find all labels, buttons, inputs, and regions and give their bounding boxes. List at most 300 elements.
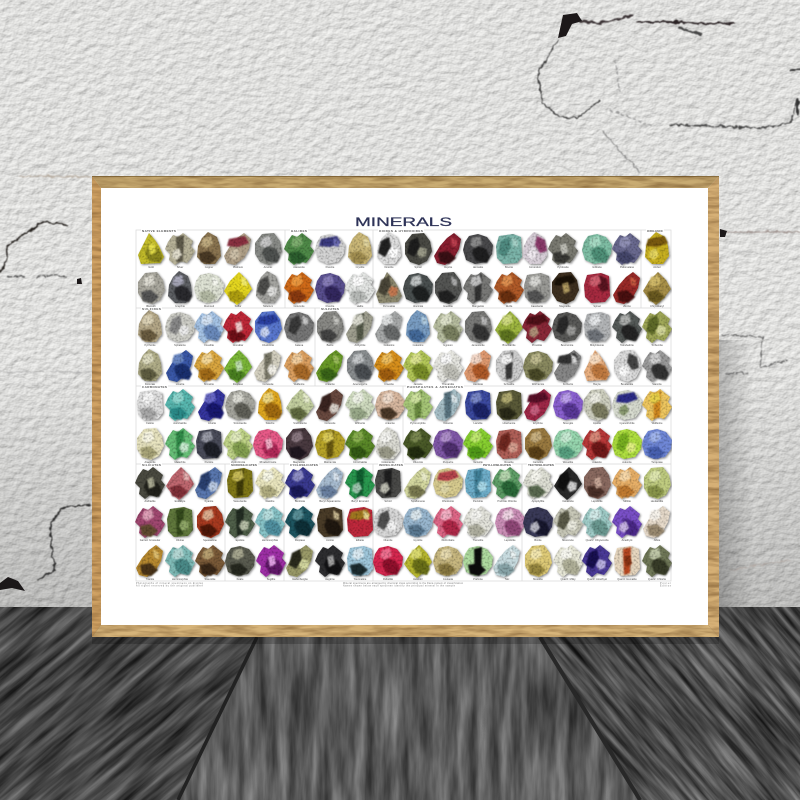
mineral: magnesite xyxy=(286,428,313,464)
mineral: quartz milky xyxy=(553,545,583,581)
mineral: anhydrite: Anhydrite xyxy=(355,343,366,347)
mineral: hanksite: Hanksite xyxy=(473,382,484,386)
mineral: quartz hematite: Quartz: Hematite xyxy=(617,577,637,581)
mineral: zincite xyxy=(613,272,640,308)
mineral: bournonite: Bournonite xyxy=(561,343,574,347)
mineral: rhodochrosite brown: Cerussite xyxy=(325,421,336,425)
mineral: diamond: Diamond xyxy=(204,304,215,308)
mineral: molybdenite xyxy=(584,312,610,347)
mineral: jarosite: Jarosite xyxy=(413,382,423,386)
section headings: SULFATES xyxy=(321,307,339,311)
mineral: cotunnite xyxy=(284,272,314,308)
mineral: chrysoberyl: Chrysoberyl xyxy=(650,304,664,308)
mineral: hemimorphite aqua xyxy=(255,506,285,542)
mineral: gibbsite: Gibbsite xyxy=(592,265,602,269)
mineral: erythrite: Erythrite xyxy=(533,421,543,425)
mineral: feldspar: Albite xyxy=(654,538,661,542)
section headings: PHOSPHATES & ARSENATES xyxy=(407,385,463,389)
mineral: barite gray: Barite xyxy=(327,343,334,347)
mineral: heulandite green: Heulandite xyxy=(651,499,664,503)
mineral: talc: Talc xyxy=(505,577,510,581)
mineral: pectolite: Pectolite xyxy=(473,499,484,503)
mineral: rhodochrosite brown xyxy=(316,389,343,425)
mineral: ilvaite black xyxy=(315,545,345,581)
mineral: wulfenite orange: Wulfenite xyxy=(294,382,305,386)
mineral: cyanotrichite: Cyanotrichite xyxy=(619,421,635,425)
mineral: chalcocite: Chalcocite xyxy=(262,343,275,347)
mineral: cavansite geode xyxy=(373,507,403,542)
mineral: tetrahedrite: Tetrahedrite xyxy=(620,343,634,347)
mineral: roselite: Roselite xyxy=(504,460,514,464)
section headings: SULFIDES xyxy=(142,307,161,311)
mineral: stilbite xyxy=(612,467,642,503)
mineral: anhydrite xyxy=(346,311,373,347)
mineral: dioptase dark: Dioptase xyxy=(295,538,306,542)
mineral: pyrite gray: Jamesonite xyxy=(471,343,485,347)
mineral: brochantite: Brochantite xyxy=(502,343,516,347)
mineral: malachite: Malachite xyxy=(174,460,186,464)
mineral: adamite red: Adamite xyxy=(592,460,602,464)
mineral: cotunnite: Cotunnite xyxy=(293,304,305,308)
mineral: scheelite: Scheelite xyxy=(504,382,515,386)
mineral: rhodonite pink xyxy=(433,506,463,542)
mineral: talc xyxy=(493,545,520,581)
mineral: spessartine xyxy=(197,506,224,542)
mineral: quartz black xyxy=(554,467,582,503)
mineral: gold xyxy=(138,233,164,269)
mineral: axinite: Axinite xyxy=(326,538,334,542)
mineral: cerianite dark: Parisite xyxy=(205,460,214,464)
mineral: quartz black: Cavansite xyxy=(562,499,574,503)
mineral: silver xyxy=(165,233,195,269)
mineral: elbaite slice xyxy=(347,507,373,542)
mineral: thenardite: Thenardite xyxy=(442,382,455,386)
mineral: stannite xyxy=(642,350,672,386)
mineral: proustite: Proustite xyxy=(532,343,543,347)
mineral: epidote: Epidote xyxy=(236,538,245,542)
mineral: spinel black: Spinel xyxy=(414,265,422,269)
mineral: vesuvianite xyxy=(227,468,253,503)
mineral: tellurium xyxy=(256,271,280,308)
mineral: rhodonite: Rhodonite xyxy=(442,499,454,503)
mineral: axinite xyxy=(317,507,343,542)
mineral: andradite cream xyxy=(286,545,313,581)
mineral: thenardite xyxy=(433,350,463,386)
mineral: gold: Gold xyxy=(148,265,154,269)
mineral: hemimorphite yellow: Mesolite xyxy=(533,577,543,581)
mineral: quartz amethyst xyxy=(582,545,612,581)
mineral: turquoise: Turquoise xyxy=(651,460,663,464)
mineral: pyrite gray xyxy=(465,311,492,347)
section headings: SILICATES xyxy=(142,463,161,467)
mineral: epidote xyxy=(225,506,255,542)
mineral: heliodor xyxy=(404,545,432,581)
footer fine print: Photographs of mineral specimens on display xyxy=(136,582,204,585)
mineral: celestine blue xyxy=(406,310,430,347)
wooden floor planks xyxy=(0,607,800,800)
mineral: goethite xyxy=(435,272,462,308)
mineral: biotite: Biotite xyxy=(534,538,542,542)
mineral: galena xyxy=(284,312,314,347)
mineral: rubellite xyxy=(373,546,403,581)
mineral: amethyst xyxy=(612,506,642,542)
mineral: zoisite xyxy=(167,507,193,542)
mineral: olivenite xyxy=(403,428,433,464)
mineral: garnet pink xyxy=(135,506,165,542)
mineral: pyrolusite xyxy=(548,233,578,269)
mineral: apatite white: Apatite xyxy=(593,421,602,425)
mineral: torbernite xyxy=(642,311,672,347)
mineral: strontianite xyxy=(225,390,255,425)
mineral: biotite xyxy=(523,507,553,542)
mineral: spinel black xyxy=(405,233,432,269)
mineral: apatite olive xyxy=(523,351,553,386)
mineral: psilomelane xyxy=(612,233,642,269)
mineral: chalcocite xyxy=(255,311,282,347)
mineral: vivianite: Vivianite xyxy=(443,421,453,425)
footer fine print: All rights reserved by the original publisher xyxy=(136,584,203,588)
mineral: kyanite xyxy=(195,467,222,503)
mineral: aquamarine xyxy=(316,467,343,503)
mineral: amethyst: Amethyst xyxy=(622,538,633,542)
mineral: dioptase: Dioptase xyxy=(233,382,244,386)
mineral: datolite xyxy=(255,467,285,503)
mineral: purpurite: Purpurite xyxy=(443,460,454,464)
mineral: wavellite: Wavellite xyxy=(563,460,574,464)
mineral: variscite xyxy=(463,428,493,464)
mineral: siderite xyxy=(258,388,282,425)
mineral: pyrolusite: Pyrolusite xyxy=(557,265,569,269)
mineral: copper xyxy=(197,232,221,269)
footer fine print: Poster xyxy=(660,582,671,585)
mineral: conichalcite: Conichalcite xyxy=(353,460,368,464)
mineral: rutile: Rutile xyxy=(506,304,513,308)
mineral: quartz chlorite: Quartz: Chlorite xyxy=(648,577,667,581)
mineral: epidote moss: Antlerite xyxy=(325,382,335,386)
mineral: andradite cream: Hedenbergite xyxy=(292,577,308,581)
mineral: elbaite slice: Elbaite xyxy=(356,538,365,542)
mineral: muscovite: Muscovite xyxy=(562,538,574,542)
mineral: sugilite xyxy=(256,545,286,581)
mineral: cookeite: Cookeite xyxy=(443,577,454,581)
mineral: staurolite: Staurolite xyxy=(205,577,216,581)
mineral: prehnite black green xyxy=(463,546,493,581)
crack blotches xyxy=(0,13,727,591)
mineral: kyanite: Kyanite xyxy=(205,499,214,503)
section headings: CYCLOSILICATES xyxy=(290,463,318,467)
mineral: cerussite: Cerussite xyxy=(263,382,274,386)
mineral: datolite: Datolite xyxy=(266,499,275,503)
mineral: aquamarine: Beryl: Aquamarine xyxy=(319,499,341,503)
section headings: OXIDES & HYDROXIDES xyxy=(379,229,423,233)
mineral: lazulite: Lazulite xyxy=(474,421,483,425)
mineral: chrysocolla: Quartz: Chrysocolla xyxy=(586,538,609,542)
poster sheet xyxy=(101,188,708,625)
mineral: heliodor: Heliodor xyxy=(413,577,423,581)
mineral: lepidolite brown xyxy=(584,467,611,503)
mineral: fluorite violet: Fluorite xyxy=(326,304,335,308)
mineral: manganite: Manganite xyxy=(472,304,485,308)
mineral: strontianite: Strontianite xyxy=(233,421,247,425)
mineral: ferberite: Ferberite xyxy=(563,382,574,386)
section headings xyxy=(141,229,664,467)
mineral: fluorite blue xyxy=(315,234,345,269)
mineral: libethenite: Libethenite xyxy=(503,421,516,425)
mineral: spodumene yellow: Spodumene xyxy=(411,499,426,503)
mineral: cuprite xyxy=(434,233,461,269)
mineral: silver: Silver xyxy=(177,265,183,269)
mineral: mottramite: Mottramite xyxy=(324,460,337,464)
mineral: hemimorphite: Hydrozincite xyxy=(231,460,246,464)
mineral: purpurite xyxy=(433,429,463,464)
mineral: apophyllite: Apophyllite xyxy=(532,499,545,503)
mineral: arsenopyrite xyxy=(347,350,374,386)
mineral: garnet pink: Garnet: Grossular xyxy=(140,538,160,542)
mineral: pale blue ball: Gyrolite xyxy=(414,538,423,542)
mineral: jarosite xyxy=(403,350,433,386)
mineral: hematite: Hematite xyxy=(473,265,484,269)
mineral: rhodochrosite: Rhodochrosite xyxy=(260,460,277,464)
mineral: quartz amethyst: Quartz: Amethyst xyxy=(587,577,607,581)
mineral: cuprite: Cuprite xyxy=(444,265,453,269)
mineral: chrysoberyl xyxy=(643,272,671,308)
mineral: cassiterite xyxy=(524,273,550,308)
mineral: schorl: Schorl xyxy=(384,499,392,503)
mineral: spodumene yellow xyxy=(404,467,431,503)
mineral: tourmaline: Tourmaline xyxy=(354,577,367,581)
mineral: prehnite xyxy=(492,467,522,503)
mineral: heulandite green xyxy=(644,467,671,503)
mineral: halite xyxy=(345,272,375,308)
mineral: witherite: Witherite xyxy=(355,421,366,425)
section headings: CARBONATES xyxy=(142,385,167,389)
mineral: adamite red xyxy=(582,428,612,464)
mineral: rubellite: Rubellite xyxy=(383,577,394,581)
mineral: hemimorphite xyxy=(223,428,253,464)
mineral: aurichalcite xyxy=(165,389,195,425)
mineral: cerussite xyxy=(254,350,281,386)
mineral: zincite: Zincite xyxy=(623,304,631,308)
mineral: goethite: Goethite xyxy=(443,304,453,308)
mineral: aquamarine cluster xyxy=(165,545,195,581)
mineral: wulfenite orange xyxy=(284,350,314,386)
mineral: mimetite xyxy=(194,350,224,386)
section headings: HALIDES xyxy=(291,229,307,233)
mineral: bismuth: Bismuth xyxy=(146,304,156,308)
mineral: apophyllite xyxy=(523,467,553,503)
mineral: bournonite xyxy=(552,312,582,347)
mineral: benitoite xyxy=(285,467,315,503)
mineral: magnetite xyxy=(552,272,579,308)
mineral: sugilite: Sugilite xyxy=(267,577,276,581)
mineral: gypsum xyxy=(433,311,463,347)
mineral: arsenic xyxy=(255,233,282,269)
mineral: dolomite: Dolomite xyxy=(145,382,156,386)
mineral: lepidolite: Lepidolite xyxy=(504,538,516,542)
mineral: prehnite: Prehnite Chlorite xyxy=(497,499,517,503)
mineral: bismuth xyxy=(138,272,165,308)
mineral: sulfur xyxy=(224,272,252,308)
mineral: aquamarine cluster: Hemimorphite xyxy=(172,577,189,581)
mineral: azurite: Azurite xyxy=(208,421,217,425)
mineral: corundum xyxy=(523,232,547,269)
mineral: fluorite violet xyxy=(315,273,345,308)
mineral: witherite xyxy=(345,389,375,425)
mineral: hemimorphite aqua: Hemimorphite xyxy=(262,538,279,542)
mineral: ferberite xyxy=(554,350,581,386)
mineral: libethenite xyxy=(496,390,522,425)
mineral: rhodonite xyxy=(433,468,463,503)
mineral: tremolite white: Tremolite xyxy=(473,538,484,542)
mineral: colemanite: Colemanite xyxy=(381,460,395,464)
mineral: perovskite: Perovskite xyxy=(383,304,396,308)
mineral: lazulite xyxy=(465,390,491,425)
mineral: colemanite xyxy=(376,427,400,464)
mineral: eudialyte xyxy=(166,467,194,503)
section headings: ORGANIC xyxy=(647,229,664,233)
mineral: cinnabar xyxy=(223,311,253,347)
mineral: diamond xyxy=(194,273,224,308)
mineral: vivianite xyxy=(434,389,461,425)
mineral: barite gray xyxy=(317,311,344,347)
wall cracks xyxy=(0,15,800,580)
mineral: galena: Galena xyxy=(295,343,304,347)
section headings: NATIVE ELEMENTS xyxy=(142,229,176,233)
mineral: zoisite: Olivine xyxy=(176,538,185,542)
mineral: ilvaite black: Aegirine xyxy=(325,577,335,581)
mineral: rhodochrosite xyxy=(253,429,283,464)
mineral: pyrrhotite xyxy=(138,310,162,347)
mineral: malachite xyxy=(165,428,195,464)
mineral: manganite xyxy=(463,272,493,308)
mineral: rhodonite pink: Pezzottaite xyxy=(442,538,455,542)
mineral: wulfenite xyxy=(642,389,672,425)
mineral: cookeite xyxy=(433,546,463,581)
mineral: sphalerite xyxy=(165,312,195,347)
mineral: olivenite: Olivenite xyxy=(413,460,424,464)
section headings: PHYLLOSILICATES xyxy=(483,463,511,467)
mineral: smithsonite: Smithsonite xyxy=(293,421,307,425)
mineral: amber: Amber xyxy=(653,265,661,269)
mineral: pyromorphite xyxy=(403,389,433,425)
mineral: carnotite xyxy=(525,428,552,464)
mineral: roselite xyxy=(496,429,522,464)
mineral: titanite: Titanite xyxy=(146,577,155,581)
mineral: arsenopyrite: Arsenopyrite xyxy=(353,382,368,386)
mineral: uraninite: Uraninite xyxy=(413,304,424,308)
mineral: pale blue ball xyxy=(403,507,433,542)
mineral: dolomite xyxy=(138,349,162,386)
footer fine print: Names shown below each specimen identify the principal mineral in the sample xyxy=(343,584,456,588)
mineral: gibbsite xyxy=(582,234,612,269)
mineral: tremolite white xyxy=(463,506,493,542)
mineral: mottramite xyxy=(315,429,345,464)
mineral: siderite: Siderite xyxy=(266,421,275,425)
mineral: tetrahedrite xyxy=(612,311,642,347)
mineral: proustite xyxy=(522,311,552,347)
mineral: carnotite: Carnotite xyxy=(533,460,544,464)
section headings: TECTOSILICATES xyxy=(528,463,554,467)
footer fine print xyxy=(136,582,672,588)
mineral: hemimorphite yellow xyxy=(525,545,552,581)
mineral: aurichalcite: Aurichalcite xyxy=(173,421,187,425)
mineral: strengite: Strengite xyxy=(563,421,574,425)
mineral: corundum: Corundum xyxy=(529,265,541,269)
mineral: gypsum: Gypsum xyxy=(443,343,453,347)
mineral: atacamite: Atacamite xyxy=(293,265,305,269)
mineral: covellite: Covellite xyxy=(204,343,215,347)
mineral: torbernite: Torbernite xyxy=(651,343,663,347)
mineral: dioptase xyxy=(224,350,252,386)
mineral: ankerite xyxy=(375,390,405,425)
mineral: benitoite: Benitoite xyxy=(295,499,306,503)
footer fine print: Mineral specimens are arranged by chemical class according to the Dana system of classification xyxy=(343,582,464,585)
mineral: beudantite xyxy=(614,350,641,386)
chart grid lines xyxy=(136,230,671,581)
mineral: eudialyte: Eudialyte xyxy=(175,499,186,503)
mineral: amber xyxy=(645,232,669,269)
mineral: celestine gray: Celestine xyxy=(384,343,395,347)
mineral: stannite: Stannite xyxy=(652,382,662,386)
mineral: ilmenite: Ilmenite xyxy=(384,265,394,269)
mineral: cerianite dark xyxy=(196,429,222,464)
mineral: ilmenite xyxy=(377,232,401,269)
mineral: cryolite: Cryolite xyxy=(356,265,365,269)
mineral: brochantite xyxy=(495,311,523,347)
mineral: schorl xyxy=(375,468,401,503)
mineral: graphite: Graphite xyxy=(175,304,186,308)
mineral: titanite xyxy=(136,545,163,581)
mineral: spessartine: Spessartine xyxy=(203,538,217,542)
mineral: baryte peach: Baryte xyxy=(593,382,601,386)
mineral: apatite olive: Wolframite xyxy=(532,382,545,386)
mineral: copper: Copper xyxy=(205,265,213,269)
mineral: psilomelane: Psilomelane xyxy=(620,265,635,269)
mineral: sphalerite: Sphalerite xyxy=(174,343,186,347)
mineral: tourmaline xyxy=(347,546,373,581)
mineral: magnetite: Magnetite xyxy=(559,304,571,308)
section headings: INOSILICATES xyxy=(379,463,403,467)
mineral: brucite: Brucite xyxy=(505,265,514,269)
mineral: pyrrhotite: Pyrrhotite xyxy=(144,343,156,347)
mineral: azurite xyxy=(198,389,225,425)
mineral: cassiterite: Cassiterite xyxy=(531,304,544,308)
mineral: quartz chlorite xyxy=(642,545,672,581)
mineral: strengite xyxy=(553,390,583,425)
mineral: vanadinite orange: Crocoite xyxy=(384,382,394,386)
mineral: epidote moss xyxy=(316,350,343,386)
mineral: lepidolite brown: Lepidolite xyxy=(591,499,603,503)
mineral: fluorite blue: Fluorite xyxy=(326,265,335,269)
mineral: celestine gray xyxy=(375,311,402,347)
mineral: calcite xyxy=(137,390,163,425)
mineral: magnesite: Magnesite xyxy=(293,460,306,464)
mineral: atacamite xyxy=(284,233,314,269)
mineral: calcite: Calcite xyxy=(146,421,155,425)
mineral: molybdenite: Molybdenite xyxy=(590,343,605,347)
mineral specimen grid xyxy=(135,232,672,581)
mineral: linarite xyxy=(166,350,193,386)
wooden picture frame xyxy=(92,176,719,637)
mineral: celestine blue: Celestine xyxy=(413,343,424,347)
mineral: graphite xyxy=(168,271,192,308)
mineral: arsenic: Arsenic xyxy=(264,265,273,269)
mineral: tellurium: Tellurium xyxy=(263,304,273,308)
mineral: rutile xyxy=(494,272,524,308)
mineral: chrysocolla xyxy=(582,506,612,542)
mineral: uraninite xyxy=(403,273,433,308)
mineral: lepidolite xyxy=(495,507,525,542)
